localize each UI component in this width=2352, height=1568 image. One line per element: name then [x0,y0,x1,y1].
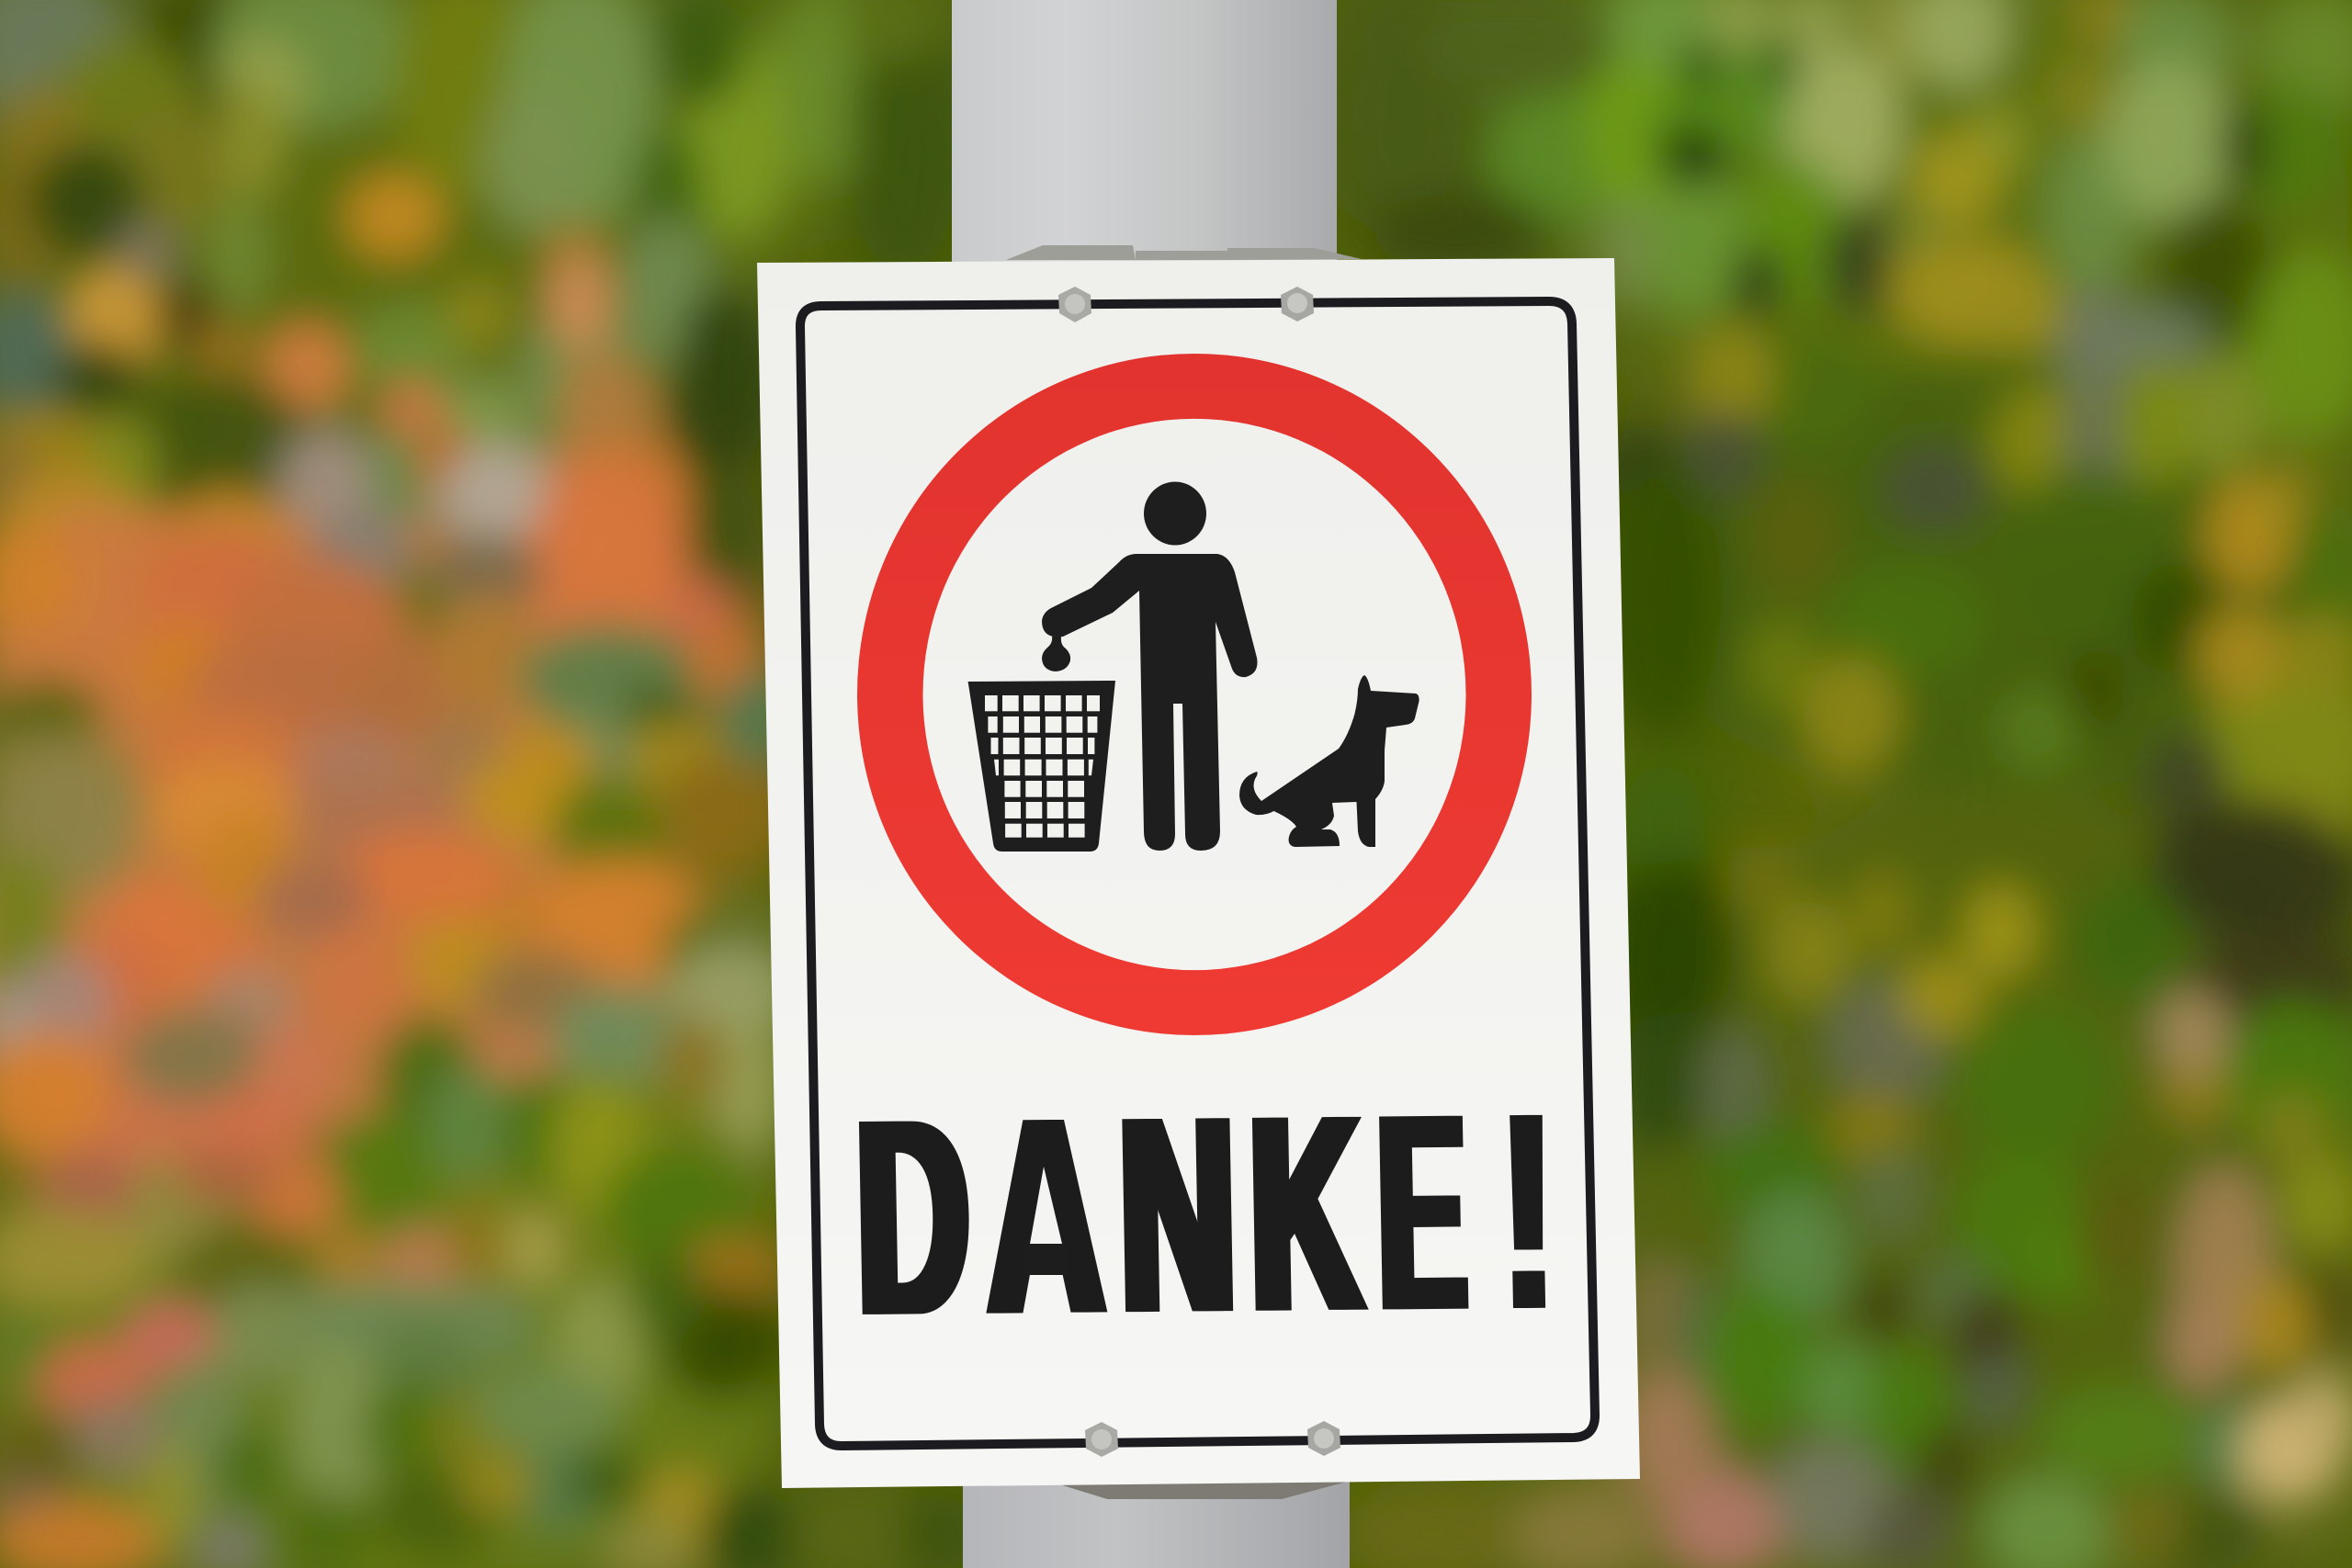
bolt: top left [1058,287,1091,322]
bolt: bottom right [1307,1421,1340,1456]
icon: person [1042,481,1257,851]
heading: DANKE ! [854,1055,1553,1374]
lower pole [963,1470,1350,1568]
bolt: bottom left [1085,1422,1118,1457]
sign panel [757,258,1640,1488]
icon: bag of waste [1042,637,1070,671]
icon: waste basket [968,681,1115,852]
prohibition ring [857,354,1532,1035]
sign border [800,301,1595,1446]
heading: DANKE !: D [854,1060,971,1374]
lower bracket [1057,1481,1351,1499]
sign panel: ! [1503,1055,1553,1368]
heading: DANKE !: N [1117,1057,1238,1371]
icon: dog [1239,675,1419,847]
heading: DANKE !: A [985,1058,1106,1373]
bolt: top right [1281,287,1314,321]
heading: DANKE !: E [1376,1055,1468,1369]
upper pole [952,0,1337,266]
letter A crossbar and counter adjustment [1025,1167,1068,1275]
heading: DANKE !: K [1248,1056,1364,1371]
upper bracket [1006,245,1362,260]
